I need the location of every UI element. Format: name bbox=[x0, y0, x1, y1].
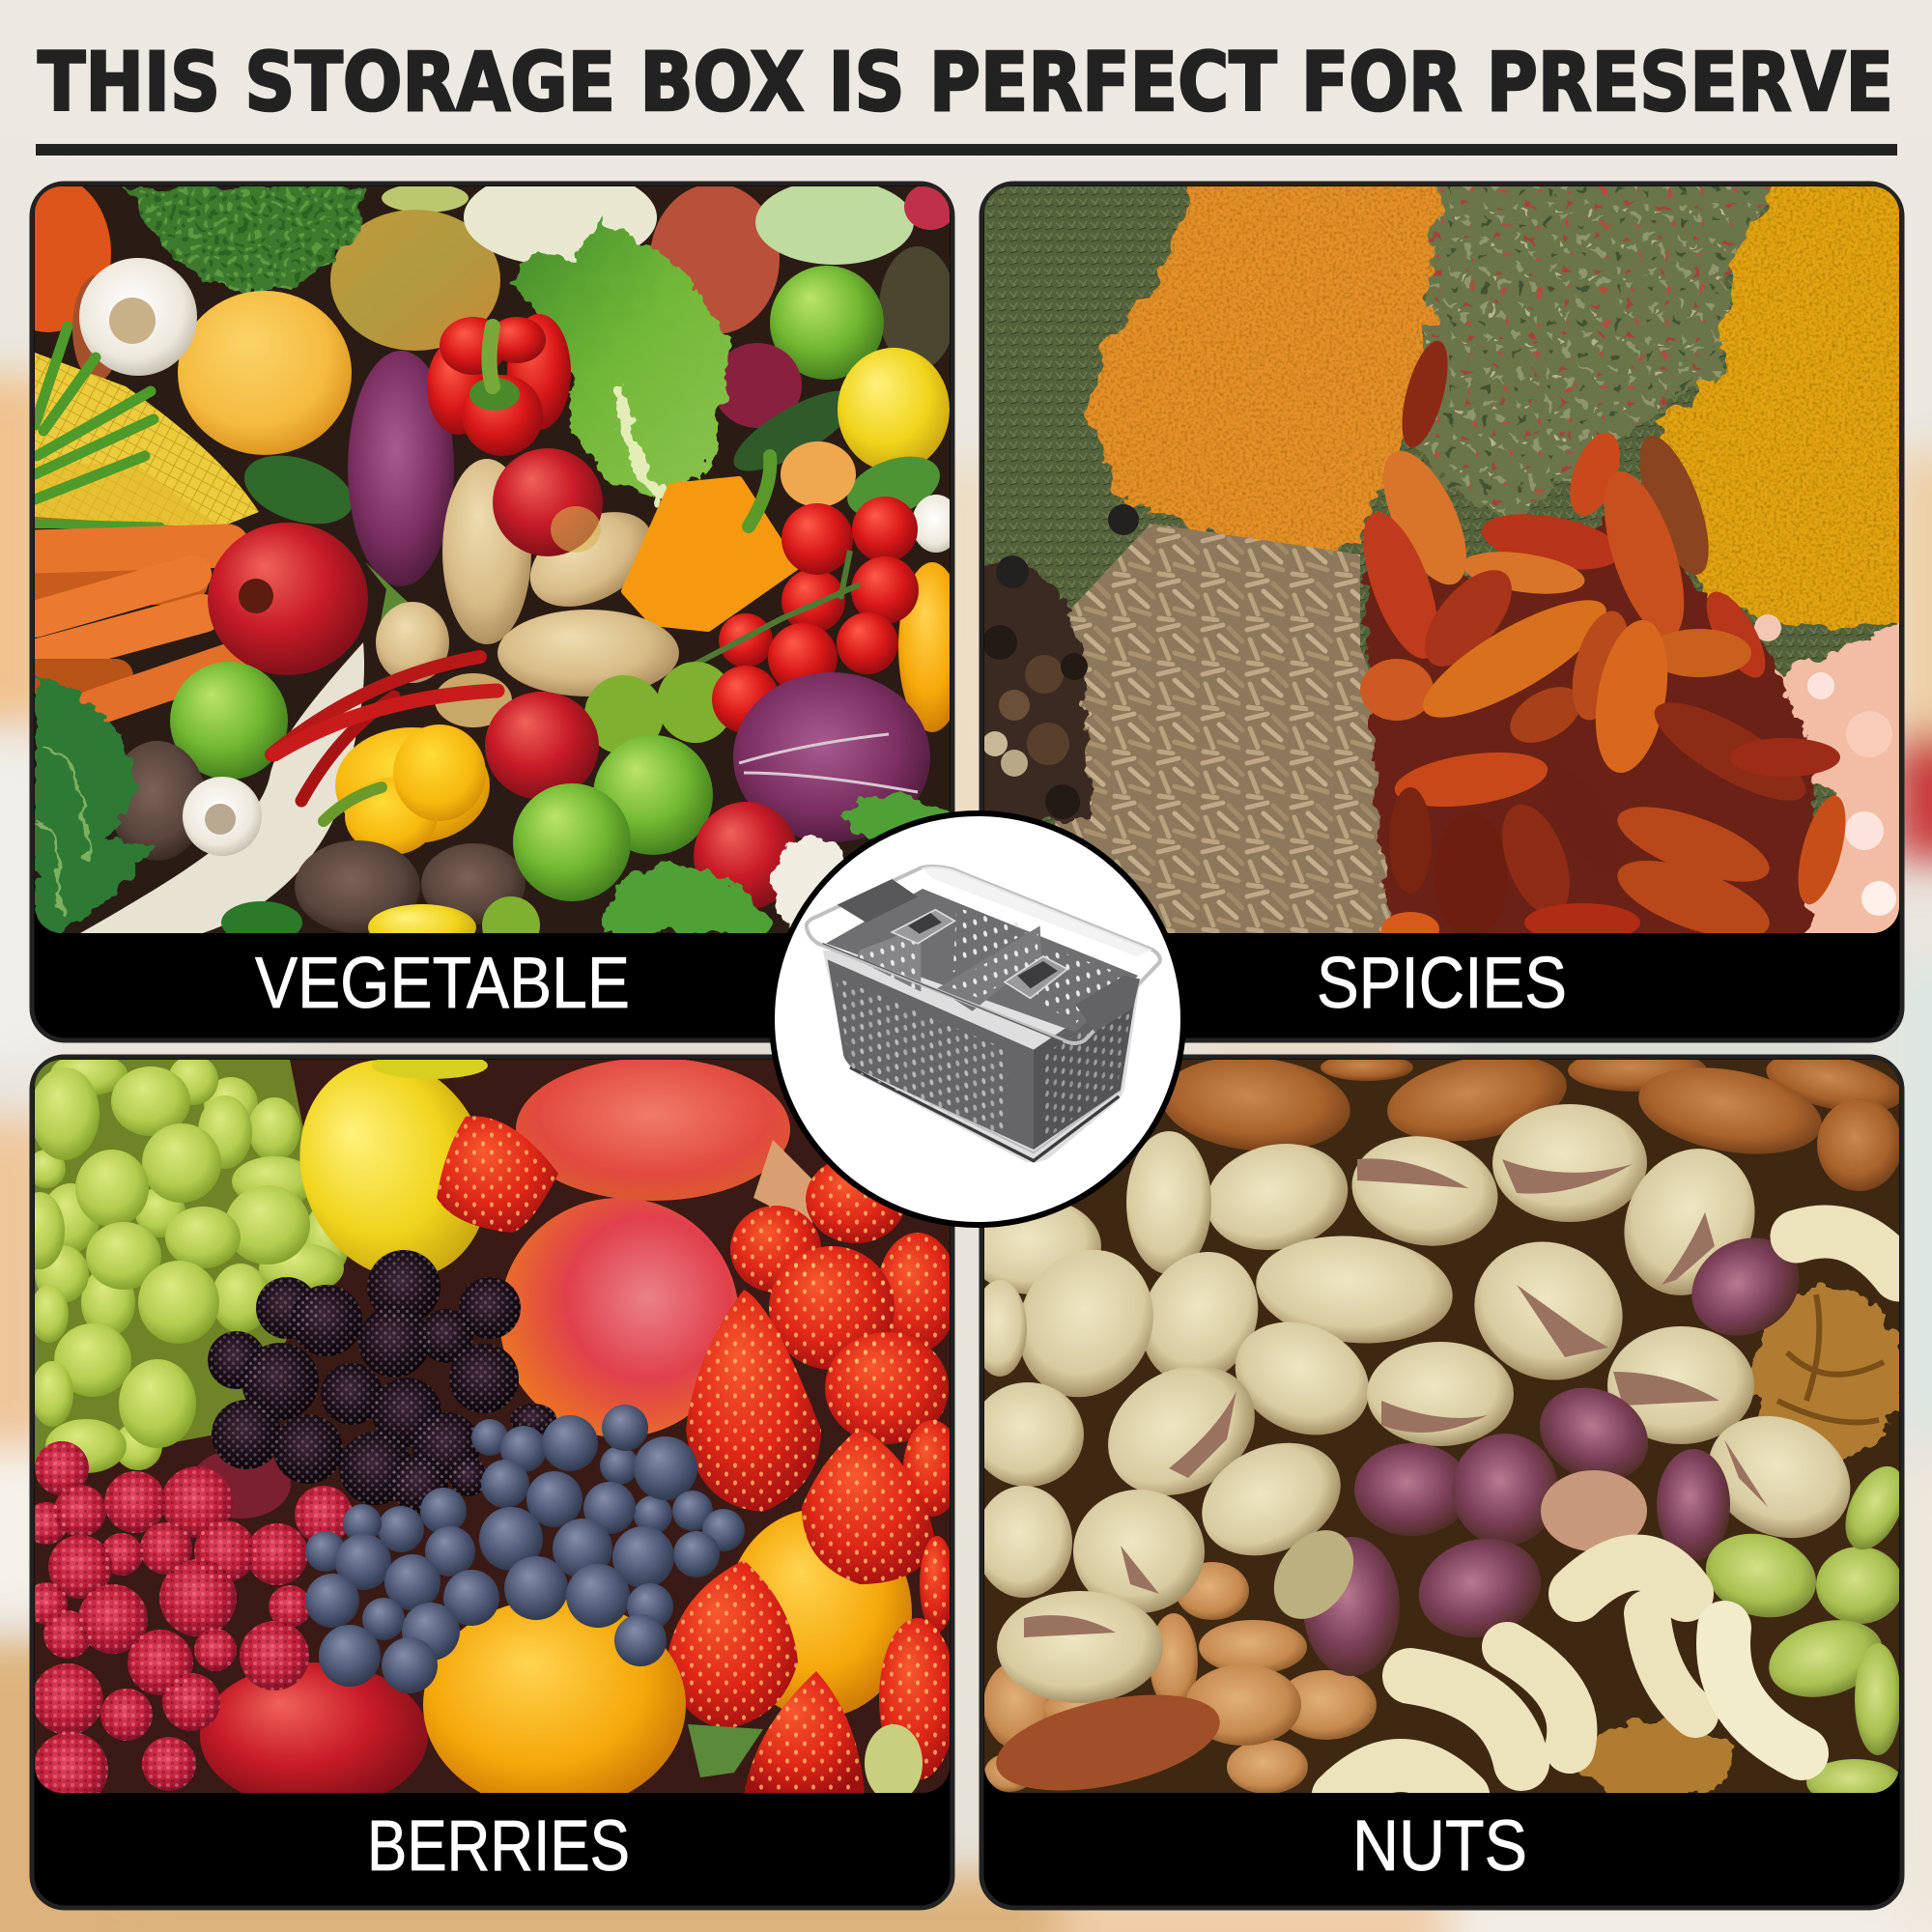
cashews bbox=[1338, 1232, 1899, 1797]
clear tray base bbox=[823, 950, 1140, 1163]
top strawberry bbox=[437, 1116, 558, 1233]
vent left bbox=[892, 910, 954, 944]
panel: berries bbox=[14, 1033, 961, 1908]
clear lid rim bbox=[807, 867, 1160, 1043]
orange bell pepper bbox=[625, 456, 795, 628]
basket right face bbox=[1034, 979, 1138, 1150]
large mango bbox=[499, 1198, 739, 1437]
orange right bbox=[726, 1509, 912, 1718]
pistachio kernels showing in shells bbox=[1024, 1158, 1768, 1637]
cumin seeds bbox=[1053, 524, 1409, 956]
peppercorns bbox=[976, 504, 1139, 821]
berries photo illustration bbox=[14, 1033, 961, 1811]
mixed dried herbs bbox=[1414, 186, 1772, 516]
red apple bottom bbox=[200, 1662, 428, 1809]
strawberries bbox=[667, 1156, 961, 1797]
basket interior bbox=[826, 889, 1138, 1032]
yellow bell pepper bbox=[324, 724, 490, 855]
center product circle bbox=[772, 813, 1183, 1225]
pistachios bbox=[966, 1104, 1870, 1703]
label: vegetable: VEGETABLE bbox=[255, 942, 630, 1023]
nuts photo illustration bbox=[966, 1042, 1917, 1808]
vent right bbox=[1005, 956, 1067, 998]
almonds bbox=[1157, 1042, 1908, 1191]
blueberries bbox=[305, 1405, 745, 1693]
latch left bbox=[838, 879, 918, 923]
icon: garlic bbox=[79, 258, 197, 376]
walnuts bbox=[1580, 1286, 1904, 1802]
latch right bbox=[1075, 976, 1140, 1032]
icon: storage box with basket bbox=[807, 867, 1160, 1163]
red bell pepper bbox=[427, 314, 571, 456]
lemon bbox=[270, 1033, 519, 1305]
broccoli bbox=[128, 186, 365, 290]
turmeric powder bbox=[1650, 164, 1922, 638]
title underline bbox=[36, 144, 1897, 156]
corn bbox=[35, 353, 259, 528]
panel: spices bbox=[976, 164, 1922, 1040]
plum bbox=[190, 1449, 291, 1519]
salt crystals bbox=[1748, 614, 1922, 956]
orange chili powder bbox=[1083, 164, 1440, 567]
lettuce bbox=[505, 218, 730, 505]
red-purple kernels bbox=[1303, 1218, 1817, 1676]
vegetable photo illustration bbox=[0, 169, 966, 954]
grapes bbox=[14, 1053, 350, 1473]
lower almonds bbox=[983, 1562, 1377, 1794]
blackberries bbox=[208, 1250, 556, 1513]
green pistachio kernels bbox=[1696, 1457, 1917, 1805]
red apple top bbox=[516, 1058, 790, 1201]
label: spicies: SPICIES bbox=[1317, 942, 1567, 1023]
orange bbox=[423, 1599, 686, 1811]
green cabbage bbox=[35, 676, 155, 933]
label: nuts: NUTS bbox=[1352, 1805, 1527, 1886]
carrots bbox=[35, 546, 232, 708]
basket front face bbox=[828, 959, 1034, 1150]
label: berries: BERRIES bbox=[367, 1805, 630, 1886]
dried chilies bbox=[1348, 336, 1855, 956]
panel: nuts bbox=[966, 1042, 1917, 1908]
purple cabbage bbox=[733, 672, 930, 842]
pecan bbox=[987, 1677, 1229, 1808]
raspberries bbox=[25, 1441, 353, 1807]
pale mango stem behind the circle bbox=[753, 1140, 821, 1227]
divider bbox=[937, 925, 1041, 1011]
panel: vegetable bbox=[0, 169, 966, 1040]
spices photo illustration bbox=[976, 164, 1922, 956]
